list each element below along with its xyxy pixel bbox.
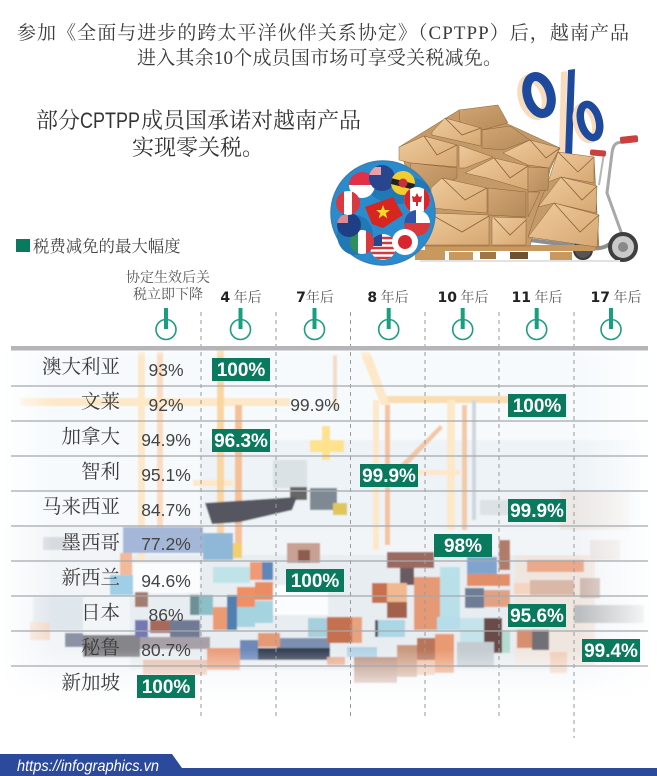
country names: 秘鲁 — [81, 637, 120, 659]
country names — [42, 356, 120, 694]
title — [17, 22, 629, 69]
subheading: 部分 — [36, 108, 80, 133]
country names: 加拿大 — [61, 426, 120, 448]
badge: Chile: 99.9% — [362, 466, 416, 487]
cardboard boxes — [399, 105, 599, 247]
pallet — [415, 245, 620, 262]
country names: 马来西亚 — [42, 496, 120, 518]
badge: Japan: 95.6% — [510, 606, 564, 627]
legend: 税费减免的最大幅度 — [33, 237, 181, 256]
badge: Singapore: 100% — [142, 677, 190, 698]
immediate reduction percentages: 77.2% — [141, 534, 191, 554]
ship — [205, 488, 347, 524]
immediate reduction percentages: 92% — [148, 395, 184, 415]
icon: flag circle — [331, 161, 435, 265]
illustration: cargo boxes on trolley with percent sign — [399, 69, 638, 262]
immediate reduction percentages: 84.7% — [141, 500, 191, 520]
badge: Brunei: 100% — [513, 396, 561, 417]
flag: Canada — [404, 187, 430, 213]
subheading: 成员国承诺对越南产品 — [141, 108, 361, 133]
header: 8 years: 8 年后 — [367, 289, 409, 306]
country names: 智利 — [81, 461, 120, 483]
flag: Singapore — [349, 172, 375, 198]
header: immediate: 协定生效后关 — [126, 269, 210, 286]
subheading: 实现零关税。 — [132, 135, 264, 160]
footer bar with website — [0, 754, 657, 776]
badge: Mexico: 98% — [444, 536, 482, 557]
flag: Brunei — [391, 171, 415, 195]
header: 10 years: 10 年后 — [438, 289, 488, 306]
subheading: CPTPP — [80, 108, 140, 133]
flag: New Zealand — [337, 213, 361, 237]
flag: Japan — [392, 229, 418, 255]
header: immediate — [126, 269, 210, 303]
footer bar with website: https://infographics.vn — [17, 758, 159, 775]
flag: Vietnam — [365, 197, 403, 228]
grid: dashed column dividers — [201, 312, 574, 738]
badge: New Zealand: 100% — [291, 571, 339, 592]
subheading — [36, 108, 361, 160]
column headers — [126, 269, 641, 306]
country names: 新加坡 — [61, 672, 120, 694]
flag: Mexico — [350, 230, 374, 254]
country names: 日本 — [81, 602, 120, 624]
title: 进入其余10个成员国市场可享受关税减免。 — [137, 47, 502, 69]
immediate reduction percentages: 94.9% — [141, 430, 191, 450]
grid: row separators — [11, 346, 648, 666]
country names: 澳大利亚 — [42, 356, 120, 378]
timeline markers — [156, 308, 621, 340]
header: 11 years: 11 年后 — [512, 289, 562, 306]
badge: Malaysia: 99.9% — [510, 501, 564, 522]
badge: Australia: 100% — [217, 360, 265, 381]
immediate reduction percentages: 80.7% — [141, 640, 191, 660]
header: 17 years: 17 年后 — [591, 289, 641, 306]
box envelope folds — [424, 118, 599, 235]
header: immediate: 税立即下降 — [133, 287, 203, 303]
header: 7 years: 7年后 — [296, 289, 334, 306]
flag: Malaysia — [370, 234, 396, 260]
containers — [123, 527, 203, 553]
immediate reduction percentages: 93% — [148, 360, 184, 380]
trolley frame — [530, 135, 638, 260]
title: 参加《全面与进步的跨太平洋伙伴关系协定》（CPTPP）后，越南产品 — [17, 22, 629, 44]
flag: Chile — [404, 210, 430, 236]
country names: 墨西哥 — [61, 532, 120, 554]
badge: Canada: 96.3% — [214, 431, 268, 452]
flag: Australia — [369, 165, 395, 191]
background photo: port with cranes and containers — [0, 350, 657, 700]
icon: percent sign — [517, 69, 603, 158]
immediate reduction percentages: 86% — [148, 605, 184, 625]
immediate reduction percentages: 99.9% — [290, 395, 340, 415]
immediate reduction percentages: 95.1% — [141, 465, 191, 485]
green result badges — [137, 358, 640, 698]
header: 4 years: 4 年后 — [220, 289, 262, 306]
flag: Peru — [336, 191, 360, 215]
country names: 文莱 — [81, 391, 120, 413]
immediate reduction percentages: 94.6% — [141, 571, 191, 591]
badge: Peru: 99.4% — [584, 641, 638, 662]
immediate reduction percentages — [141, 360, 340, 660]
country names: 新西兰 — [61, 567, 120, 589]
badge: Mexico — [434, 534, 492, 557]
